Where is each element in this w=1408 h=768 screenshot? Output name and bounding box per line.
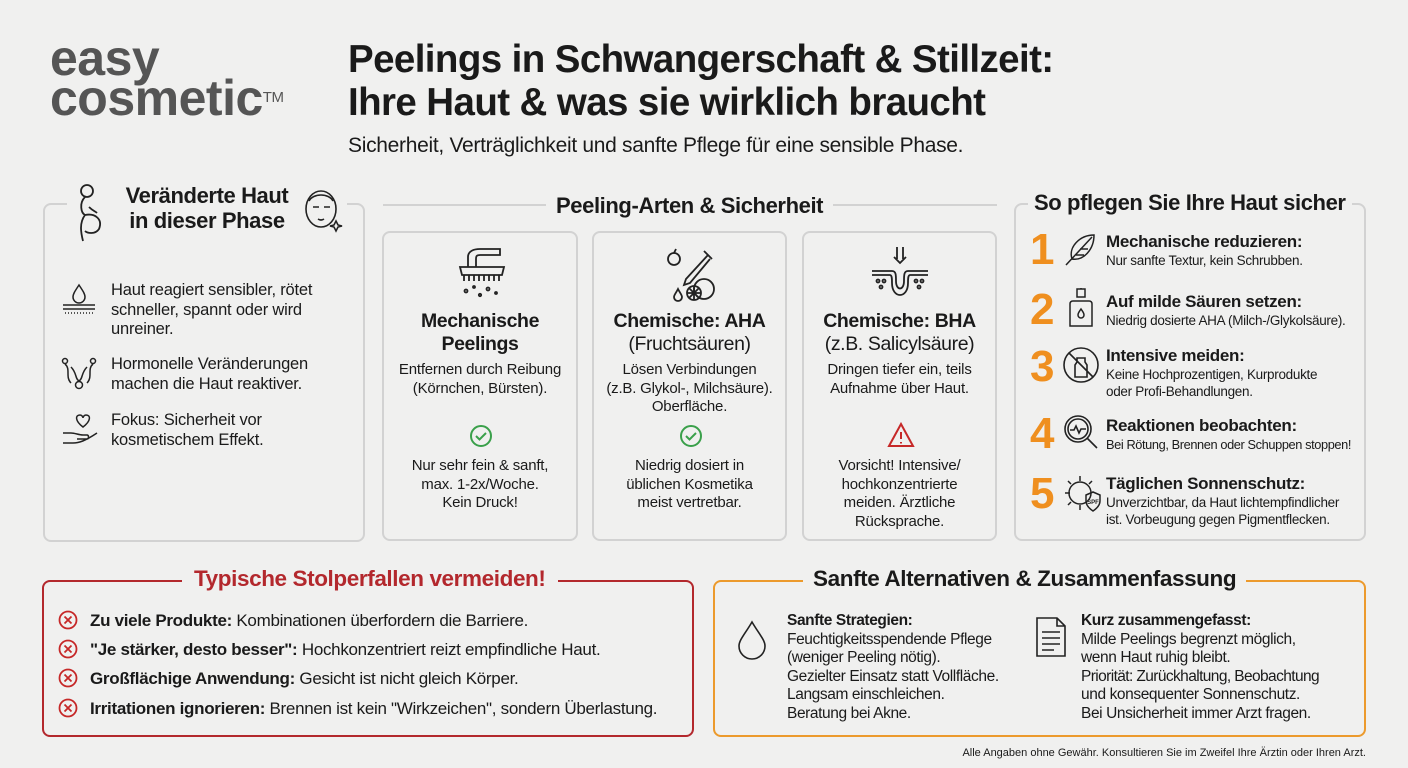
logo: easy	[50, 30, 159, 86]
card: AHA: meist vertretbar.	[637, 494, 742, 511]
icon: warning	[887, 422, 915, 447]
card: BHA: (z.B. Salicylsäure)	[825, 333, 974, 355]
card: Mechanische Peelings: Kein Druck!	[442, 494, 518, 511]
column: kurz: Priorität: Zurückhaltung, Beobachtung	[1081, 668, 1319, 684]
column: strategien: Feuchtigkeitsspendende Pflege	[787, 630, 992, 648]
logo: cosmeticTM	[50, 70, 283, 126]
list: Irritationen ignorieren: Brennen ist kein "Wirkzeichen", sondern Überlastung.	[90, 699, 657, 718]
item: hormone	[62, 355, 308, 392]
card: BHA: hochkonzentrierte	[842, 476, 957, 492]
column: strategien	[738, 612, 999, 722]
column: kurz: Bei Unsicherheit immer Arzt fragen.	[1081, 704, 1311, 722]
step 2	[1030, 285, 1345, 334]
card: Mechanische Peelings: Entfernen durch Reibung	[399, 361, 561, 378]
step 3: Intensive meiden:	[1106, 346, 1244, 365]
card: Mechanische Peelings: (Körnchen, Bürsten).	[413, 380, 547, 396]
heading: So pflegen Sie Ihre Haut sicher	[1034, 190, 1346, 215]
column: strategien: (weniger Peeling nötig).	[787, 649, 940, 666]
panel: Stolperfallen	[42, 580, 694, 737]
card: AHA: (Fruchtsäuren)	[628, 333, 751, 355]
title	[348, 38, 1054, 124]
list: "Je stärker, desto besser": Hochkonzentriert reizt empfindliche Haut.	[90, 640, 600, 659]
item: sensibel: unreiner.	[111, 320, 173, 338]
column: strategien: Sanfte Strategien:	[787, 612, 912, 629]
card: AHA: Chemische: AHA	[614, 310, 765, 332]
card: AHA: Lösen Verbindungen	[622, 361, 757, 378]
step 5: Täglichen Sonnenschutz:	[1106, 474, 1305, 493]
step 4: Bei Rötung, Brennen oder Schuppen stoppen!	[1106, 437, 1351, 452]
column: kurz	[1036, 612, 1319, 722]
step 3: oder Profi-Behandlungen.	[1106, 384, 1253, 399]
list: Zu viele Produkte: Kombinationen überfordern die Barriere.	[90, 611, 528, 630]
step 1: 1	[1030, 225, 1054, 274]
card: AHA	[592, 231, 787, 541]
item: fokus	[63, 411, 264, 448]
item: hormone: Hormonelle Veränderungen	[111, 355, 308, 373]
list	[58, 610, 657, 718]
card: Mechanische Peelings: Mechanische	[421, 310, 539, 332]
step 2: 2	[1030, 285, 1054, 334]
card: BHA	[802, 231, 997, 541]
step 5: Unverzichtbar, da Haut lichtempfindlicher	[1106, 495, 1339, 510]
card: AHA: Niedrig dosiert in	[635, 457, 744, 474]
step 5: ist. Vorbeugung gegen Pigmentflecken.	[1106, 512, 1330, 527]
step 2: Niedrig dosierte AHA (Milch-/Glykolsäure).	[1106, 313, 1345, 328]
panel: Sanfte Alternativen	[713, 580, 1366, 737]
panel: Veränderte Haut	[43, 203, 365, 542]
heading: Peeling-Arten: Peeling-Arten & Sicherheit	[556, 193, 823, 218]
footer disclaimer: Alle Angaben ohne Gewähr. Konsultieren Sie im Zweifel Ihre Ärztin oder Ihren Arzt.	[962, 747, 1366, 759]
card: BHA: Dringen tiefer ein, teils	[827, 361, 972, 378]
card: BHA: Vorsicht! Intensive/	[839, 457, 960, 474]
list: Großflächige Anwendung: Gesicht ist nicht gleich Körper.	[90, 669, 518, 688]
title: Ihre Haut & was sie wirklich braucht	[348, 81, 985, 124]
item: fokus: Fokus: Sicherheit vor	[111, 411, 262, 429]
column: kurz: und konsequenter Sonnenschutz.	[1081, 686, 1300, 703]
column: kurz: Kurz zusammengefasst:	[1081, 612, 1251, 629]
column: strategien: Beratung bei Akne.	[787, 704, 911, 722]
icon: brush	[458, 248, 506, 298]
item: sensibel: Haut reagiert sensibler, rötet	[111, 281, 312, 299]
card: BHA: Aufnahme über Haut.	[830, 380, 969, 396]
step 4: 4	[1030, 409, 1054, 458]
item: sensibel	[63, 281, 312, 338]
heading: Veränderte Haut: in dieser Phase	[129, 208, 285, 233]
step 4: Reaktionen beobachten:	[1106, 416, 1297, 435]
step 5: 5	[1030, 469, 1054, 518]
card: AHA: Oberfläche.	[652, 398, 727, 415]
column: kurz: Milde Peelings begrenzt möglich,	[1081, 630, 1296, 648]
title: Peelings in Schwangerschaft & Stillzeit:	[348, 38, 1054, 81]
logo	[50, 30, 283, 126]
step 3: 3	[1030, 342, 1054, 391]
heading: Veränderte Haut	[67, 183, 347, 243]
card: BHA: Rücksprache.	[855, 512, 944, 530]
heading: Sanfte Alternativen & Zusammenfassung	[813, 566, 1236, 591]
step 3: Keine Hochprozentigen, Kurprodukte	[1106, 367, 1317, 382]
item: fokus: kosmetischem Effekt.	[111, 430, 264, 448]
card: Mechanische Peelings	[382, 231, 578, 541]
subtitle: Sicherheit, Verträglichkeit und sanfte Pflege für eine sensible Phase.	[348, 134, 963, 157]
step 1: Nur sanfte Textur, kein Schrubben.	[1106, 253, 1303, 268]
step 4	[1030, 409, 1351, 458]
step 5: SPF	[1087, 500, 1099, 506]
heading: Veränderte Haut: Veränderte Haut	[126, 183, 288, 208]
column: kurz: wenn Haut ruhig bleibt.	[1081, 649, 1230, 666]
heading: Typische Stolperfallen vermeiden!	[194, 566, 546, 591]
card: Mechanische Peelings: Peelings	[442, 333, 518, 355]
icon: dropper fruits	[667, 248, 715, 302]
step 1: Mechanische reduzieren:	[1106, 232, 1302, 251]
icon: check	[680, 425, 702, 447]
icon: pore	[872, 247, 928, 296]
card: BHA: meiden. Ärztliche	[844, 494, 955, 511]
step 5	[1030, 469, 1340, 527]
item: sensibel: schneller, spannt oder wird	[111, 300, 302, 318]
step 3	[1030, 342, 1317, 399]
column: strategien: Langsam einschleichen.	[787, 686, 944, 703]
card: Mechanische Peelings: Nur sehr fein & sanft,	[412, 457, 548, 474]
step 1	[1030, 225, 1303, 274]
card: AHA: üblichen Kosmetika	[626, 476, 753, 492]
card: AHA: (z.B. Glykol-, Milchsäure).	[606, 380, 773, 396]
column: strategien: Gezielter Einsatz statt Vollfläche.	[787, 668, 999, 684]
panel: So pflegen Sie	[1014, 203, 1366, 541]
card: Mechanische Peelings: max. 1-2x/Woche.	[421, 476, 539, 492]
card: BHA: Chemische: BHA	[823, 310, 976, 332]
item: hormone: machen die Haut reaktiver.	[111, 374, 302, 392]
icon: check	[470, 425, 492, 447]
step 2: Auf milde Säuren setzen:	[1106, 292, 1302, 311]
